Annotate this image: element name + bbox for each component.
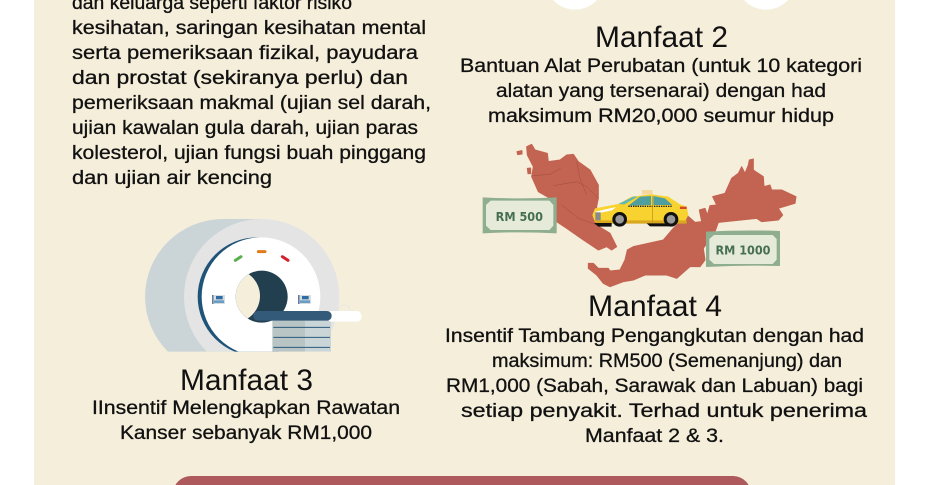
text block: Manfaat 1 description: kesihatan, saringan kesihatan mental bbox=[72, 18, 426, 39]
text block: Manfaat 1 description: pemeriksaan makmal (ujian sel darah, bbox=[72, 93, 431, 114]
text block: Manfaat 4 description: Manfaat 2 & 3. bbox=[585, 426, 724, 447]
text block: Manfaat 4 description: setiap penyakit. Terhad untuk penerima bbox=[461, 401, 868, 422]
text block: Manfaat 3 description: Kanser sebanyak RM1,000 bbox=[120, 423, 372, 444]
scanner blue rim bbox=[198, 237, 280, 352]
text block: Manfaat 2 description: alatan yang tersenarai) dengan had bbox=[496, 81, 826, 102]
text block: Manfaat 1 description: ujian kawalan gula darah, ujian paras bbox=[72, 118, 418, 139]
text block: Manfaat 3 description bbox=[92, 398, 400, 444]
patient bed bbox=[253, 305, 362, 322]
icon: banknote RM 500 bbox=[483, 197, 557, 233]
text block: Manfaat 1 description: kolesterol, ujian fungsi buah pinggang bbox=[72, 143, 426, 164]
footer banner bbox=[173, 476, 751, 485]
scanner body back bbox=[145, 219, 258, 352]
heading: Manfaat 3: Manfaat 3 bbox=[180, 364, 313, 397]
text block: Manfaat 1 description: dan ujian air kencing bbox=[72, 168, 272, 189]
icon: banknote RM 1000 bbox=[706, 230, 780, 267]
text block: Manfaat 1 description: dan prostat (sekiranya perlu) dan bbox=[72, 68, 408, 89]
text block: Manfaat 2 description: maksimum RM20,000 seumur hidup bbox=[488, 106, 834, 127]
scanner bore bbox=[236, 270, 288, 323]
text block: Manfaat 1 description bbox=[72, 0, 431, 189]
text block: Manfaat 2 description bbox=[460, 56, 862, 127]
text block: Manfaat 3 description: IInsentif Melengkapkan Rawatan bbox=[92, 398, 400, 419]
status lights bbox=[235, 252, 288, 260]
patient table base bbox=[272, 318, 331, 352]
text block: Manfaat 2 description: Bantuan Alat Perubatan (untuk 10 kategori bbox=[460, 56, 862, 77]
text block: Manfaat 4 description: maksimum: RM500 (Semenanjung) dan bbox=[492, 351, 842, 372]
illustration: Malaysia map with taxi and money bbox=[483, 144, 796, 287]
icon: banknote RM 500: RM 500 bbox=[496, 209, 543, 224]
text block: Manfaat 4 description: Insentif Tambang Pengangkutan dengan had bbox=[445, 326, 864, 347]
icon: white circles at top bbox=[553, 0, 788, 10]
heading: Manfaat 4: Manfaat 4 bbox=[588, 290, 722, 323]
text block: Manfaat 1 description: serta pemeriksaan fizikal, payudara bbox=[72, 43, 418, 64]
map: East Malaysia bbox=[588, 159, 796, 287]
scanner white face bbox=[202, 237, 320, 356]
map: Peninsular Malaysia bbox=[517, 144, 617, 250]
icon: MRI scanner bbox=[145, 219, 362, 352]
icon: banknote RM 1000: RM 1000 bbox=[715, 242, 771, 257]
control panels bbox=[212, 295, 311, 304]
text block: Manfaat 4 description: RM1,000 (Sabah, Sarawak dan Labuan) bagi bbox=[446, 376, 863, 397]
scanner front ring bbox=[184, 219, 340, 352]
icon: yellow taxi bbox=[592, 190, 688, 227]
text block: Manfaat 4 description bbox=[445, 326, 868, 447]
heading: Manfaat 2: Manfaat 2 bbox=[595, 21, 728, 54]
